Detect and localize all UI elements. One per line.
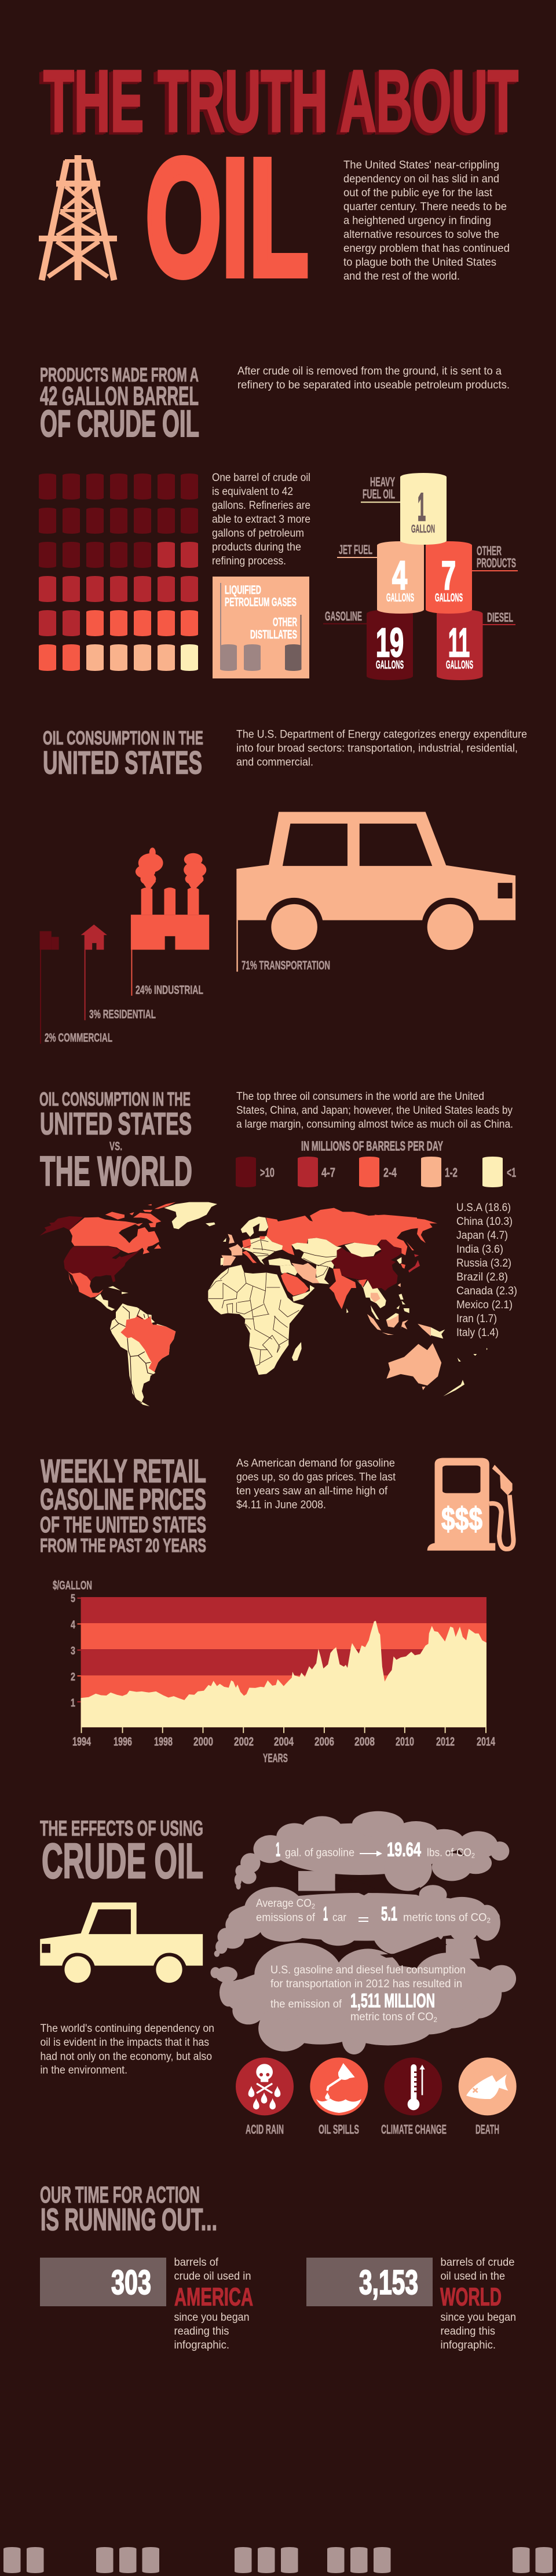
text: continuing dependency xyxy=(41,2023,214,2076)
label: 3% residential: 3% RESIDENTIAL xyxy=(89,1008,156,1021)
label: oil spills: OIL SPILLS xyxy=(319,2122,359,2137)
label: diesel: DIESEL xyxy=(487,610,513,625)
axis: dollars per gallon: $/GALLON xyxy=(53,1579,92,1592)
label: other products xyxy=(472,544,518,571)
axis: years: 1996 xyxy=(114,1735,132,1748)
stat: 1 gallon of gasoline to 19.64 lbs of CO2: 1 xyxy=(276,1839,280,1861)
list: top consumers: Iran (1.7) xyxy=(456,1313,497,1325)
axis: dollars per gallon xyxy=(53,1579,92,1709)
heading: oil consumption in the United States xyxy=(43,727,203,780)
text: one barrel explanation: able to extract 3 more xyxy=(212,513,310,526)
stat: 1 gallon of gasoline to 19.64 lbs of CO2: 19.64 xyxy=(387,1839,421,1861)
label: 2% commercial: 2% COMMERCIAL xyxy=(45,1032,112,1044)
stat: 1,511 million metric tons of CO2: 1,511 MILLION xyxy=(350,1990,435,2012)
icon: climate change xyxy=(384,2057,442,2115)
barrel: heavy fuel oil 1 gallon: 1 xyxy=(418,485,426,529)
barrel: gasoline 19 gallons: GALLONS xyxy=(376,659,404,671)
illustration: exhaust clouds xyxy=(210,1811,516,2054)
text: demand and prices: As American demand for gasoline xyxy=(236,1458,395,1469)
legend: millions of barrels per day: IN MILLIONS OF BARRELS PER DAY xyxy=(301,1138,443,1153)
label: climate change: CLIMATE CHANGE xyxy=(381,2122,447,2137)
text: one barrel explanation xyxy=(212,472,310,567)
list: top consumers: Canada (2.3) xyxy=(456,1285,517,1297)
axis: years: YEARS xyxy=(263,1752,288,1765)
text: top three consumers: The top three oil consumers in the world are the United xyxy=(236,1091,484,1103)
heading: United States vs. the world: OIL CONSUMPTION IN THE xyxy=(39,1088,191,1110)
text: intro paragraph: a heightened urgency in finding xyxy=(343,215,491,227)
map: world oil consumption xyxy=(39,1202,488,1406)
chart: stacked barrels by product xyxy=(323,473,518,680)
callout: other refinery products box xyxy=(213,577,309,678)
text: energy sectors xyxy=(236,728,527,769)
label: gasoline: GASOLINE xyxy=(325,609,362,623)
callout: other refinery products box: LIQUIFIED xyxy=(225,584,261,597)
text: intro paragraph: energy problem that has continued xyxy=(343,243,510,255)
text: intro paragraph: The United States' near-crippling xyxy=(343,159,499,171)
stat: 303 barrels in America: crude oil used in xyxy=(174,2270,251,2283)
text: continuing dependency: in the environment. xyxy=(41,2064,127,2076)
stat: 3,153 barrels in the world: barrels of crude xyxy=(440,2256,514,2269)
text: top three consumers xyxy=(236,1091,513,1131)
label: heavy fuel oil xyxy=(361,475,401,502)
text: intro paragraph xyxy=(343,159,510,282)
stat: 303 barrels in America: 303 xyxy=(111,2263,151,2302)
footer: row of barrels xyxy=(3,2547,553,2573)
chart: 42 barrel unit grid xyxy=(39,474,198,671)
text: one barrel explanation: gallons. Refineries are xyxy=(212,500,310,512)
callout: other refinery products box: DISTILLATES xyxy=(250,628,297,641)
stat: 1 car equals 5.1 metric tons of CO2: emissions of xyxy=(256,1911,316,1924)
callout: other refinery products box: PETROLEUM GASES xyxy=(225,596,297,609)
icon: oil derrick xyxy=(39,155,117,280)
heading: our time for action is running out: OUR TIME FOR ACTION xyxy=(40,2182,200,2208)
barrel: diesel 11 gallons xyxy=(437,610,483,680)
heading: the effects of using crude oil: CRUDE OIL xyxy=(42,1834,203,1889)
stat: 303 barrels in America: AMERICA xyxy=(174,2283,253,2311)
stat: 303 barrels in America: since you began xyxy=(174,2311,249,2324)
label: 24% industrial: 24% INDUSTRIAL xyxy=(136,984,203,997)
label: jet fuel xyxy=(337,542,377,558)
icon: dead fish xyxy=(459,2057,517,2115)
axis: years: 2010 xyxy=(396,1735,414,1748)
text: one barrel explanation: refining process. xyxy=(212,555,286,567)
barrel: diesel 11 gallons: GALLONS xyxy=(446,659,473,671)
text: top three consumers: a large margin, consuming almost twice as much oil as China. xyxy=(236,1118,513,1131)
text: one barrel explanation: One barrel of crude oil xyxy=(212,472,310,484)
text: one barrel explanation: is equivalent to 42 xyxy=(212,486,293,498)
text: one barrel explanation: gallons of petroleum xyxy=(212,527,304,540)
panel: US vs the world xyxy=(39,1088,517,1406)
barrel: other products 7 gallons: 7 xyxy=(441,553,456,598)
stat: 1,511 million metric tons of CO2: U.S. gasoline and diesel fuel consumption xyxy=(270,1964,466,1976)
text: intro paragraph: dependency on oil has slid in and xyxy=(343,173,499,185)
stat: 3,153 barrels in the world: WORLD xyxy=(440,2283,502,2311)
icon: pickup truck xyxy=(40,1903,203,1983)
heading: products made from a 42 gallon barrel: 42 GALLON BARREL xyxy=(40,381,199,411)
text: demand and prices xyxy=(236,1458,396,1511)
text: intro paragraph: quarter century. There needs to be xyxy=(343,201,507,213)
stat: 1,511 million metric tons of CO2: the emission of xyxy=(270,1998,342,2010)
panel: gasoline prices xyxy=(40,1453,514,1765)
text: one barrel explanation: products during the xyxy=(212,541,301,553)
axis: years xyxy=(72,1735,495,1765)
axis: years: 2014 xyxy=(477,1735,495,1748)
text: intro paragraph: and the rest of the world. xyxy=(343,270,460,282)
stat: 1,511 million metric tons of CO2: 2 xyxy=(434,2016,437,2024)
label: other products: PRODUCTS xyxy=(477,556,516,570)
legend: millions of barrels per day: 1-2 xyxy=(445,1165,458,1180)
label: jet fuel: JET FUEL xyxy=(339,542,372,557)
barrel: other products 7 gallons xyxy=(426,541,472,614)
stat: 1 car equals 5.1 metric tons of CO2: 2 xyxy=(487,1916,491,1924)
barrel: gasoline 19 gallons: 19 xyxy=(376,620,404,665)
legend: millions of barrels per day: >10 xyxy=(260,1165,275,1180)
heading: products made from a 42 gallon barrel xyxy=(40,364,199,445)
list: top consumers: Japan (4.7) xyxy=(456,1230,508,1242)
heading: oil consumption in the United States: OIL CONSUMPTION IN THE xyxy=(43,727,203,748)
panel: time for action xyxy=(40,2182,516,2351)
axis: dollars per gallon: 3 xyxy=(71,1645,75,1657)
heading: our time for action is running out: IS RUNNING OUT... xyxy=(41,2203,217,2237)
icon: acid rain xyxy=(236,2057,294,2115)
heading: United States vs. the world: UNITED STATES xyxy=(40,1107,192,1142)
text: continuing dependency: had not only on the economy, but also xyxy=(41,2050,212,2063)
barrel: other products 7 gallons: GALLONS xyxy=(435,592,463,604)
axis: years: 2000 xyxy=(193,1735,213,1748)
list: top consumers: Russia (3.2) xyxy=(456,1257,511,1269)
axis: dollars per gallon: 5 xyxy=(71,1593,75,1605)
axis: dollars per gallon: 1 xyxy=(71,1697,75,1709)
heading: products made from a 42 gallon barrel: PRODUCTS MADE FROM A xyxy=(40,364,199,386)
heading: products made from a 42 gallon barrel: OF CRUDE OIL xyxy=(40,402,199,445)
barrel: jet fuel 4 gallons: 4 xyxy=(392,553,407,598)
text: demand and prices: $4.11 in June 2008. xyxy=(236,1499,326,1511)
barrel: gasoline 19 gallons xyxy=(367,610,413,680)
axis: years: 2004 xyxy=(274,1735,294,1748)
text: refinery intro xyxy=(237,365,510,391)
icon: gas pump xyxy=(427,1458,514,1551)
icon: oil spills xyxy=(310,2057,368,2115)
legend: millions of barrels per day: 2-4 xyxy=(383,1165,397,1180)
heading: oil consumption in the United States: UNITED STATES xyxy=(43,744,202,780)
label: other products: OTHER xyxy=(477,544,502,558)
panel: effects of crude oil xyxy=(40,1811,517,2137)
barrel: jet fuel 4 gallons xyxy=(377,541,424,614)
text: refinery intro: After crude oil is removed from the ground, it is sent to a xyxy=(237,365,502,377)
label: heavy fuel oil: HEAVY xyxy=(370,475,395,489)
heading: weekly retail gasoline prices xyxy=(40,1453,206,1556)
stat: 3,153 barrels in the world: infographic. xyxy=(440,2339,496,2351)
heading: weekly retail gasoline prices: FROM THE PAST 20 YEARS xyxy=(40,1535,206,1556)
text: continuing dependency: The world's continuing dependency on xyxy=(41,2023,214,2035)
list: top consumers: U.S.A (18.6) xyxy=(456,1202,511,1214)
axis: years: 2002 xyxy=(234,1735,254,1748)
axis: years: 2008 xyxy=(354,1735,375,1748)
icon: car, 71% transportation xyxy=(236,812,515,972)
text: energy sectors: The U.S. Department of Energy categorizes energy expenditure xyxy=(236,728,527,741)
axis: years: 2006 xyxy=(314,1735,334,1748)
heading: our time for action is running out xyxy=(40,2182,217,2237)
panel: products from a barrel xyxy=(39,364,518,680)
stat: 1 gallon of gasoline to 19.64 lbs of CO2: 2 xyxy=(471,1851,475,1859)
legend: millions of barrels per day: 4-7 xyxy=(321,1165,335,1180)
legend: millions of barrels per day: <1 xyxy=(507,1165,516,1180)
stat: 303 barrels in America: reading this xyxy=(174,2325,229,2338)
stat: 303 barrels in America: infographic. xyxy=(174,2339,229,2351)
label: 71% transportation: 71% TRANSPORTATION xyxy=(242,959,330,973)
stat: 1 car equals 5.1 metric tons of CO2: 2 xyxy=(312,1902,315,1910)
heading: weekly retail gasoline prices: GASOLINE PRICES xyxy=(40,1483,206,1515)
list: top consumers: Mexico (2.1) xyxy=(456,1299,513,1311)
text: intro paragraph: alternative resources to solve the xyxy=(343,229,499,241)
text: demand and prices: goes up, so do gas prices. The last xyxy=(236,1472,396,1483)
barrel: diesel 11 gallons: 11 xyxy=(448,620,470,665)
text: continuing dependency: oil is evident in the impacts that it has xyxy=(41,2036,209,2049)
legend: millions of barrels per day xyxy=(236,1138,516,1187)
heading: weekly retail gasoline prices: WEEKLY RETAIL xyxy=(41,1453,206,1490)
stat: 1 gallon of gasoline to 19.64 lbs of CO2: lbs. of CO xyxy=(427,1847,475,1859)
stat: 303 barrels in America: barrels of xyxy=(174,2256,219,2269)
label: acid rain: ACID RAIN xyxy=(246,2122,284,2137)
text: intro paragraph: to plague both the United States xyxy=(343,256,496,269)
map: Europe, Africa and Asia xyxy=(206,1208,417,1375)
stat: 3,153 barrels in the world: reading this xyxy=(440,2325,495,2338)
text: intro paragraph: out of the public eye for the last xyxy=(343,187,493,199)
stat: 3,153 barrels in the world: oil used in the xyxy=(440,2270,505,2283)
callout: other refinery products box: OTHER xyxy=(273,616,297,629)
text: energy sectors: and commercial. xyxy=(236,756,313,769)
text: top three consumers: States, China, and Japan; however, the United States leads by xyxy=(236,1104,513,1117)
axis: years: 1998 xyxy=(154,1735,173,1748)
text: demand and prices: ten years saw an all-time high of xyxy=(236,1485,388,1497)
stat: 1 car equals 5.1 metric tons of CO2: 5.1 xyxy=(381,1903,397,1925)
label: heavy fuel oil: FUEL OIL xyxy=(363,487,395,501)
heading: the effects of using crude oil: THE EFFECTS OF USING xyxy=(40,1817,203,1840)
list: top consumers: China (10.3) xyxy=(456,1216,513,1228)
text: refinery intro: refinery to be separated into useable petroleum products. xyxy=(237,379,510,391)
heading: United States vs. the world: VS. xyxy=(109,1140,122,1153)
list: top consumers xyxy=(456,1202,517,1339)
stat: 1 car equals 5.1 metric tons of CO2: Average CO xyxy=(256,1898,316,1910)
heading: OIL: OIL xyxy=(145,124,309,311)
heading: United States vs. the world: THE WORLD xyxy=(40,1148,192,1195)
list: top consumers: Brazil (2.8) xyxy=(456,1271,508,1283)
stat: 1,511 million metric tons of CO2 xyxy=(270,1964,466,2024)
label: death: DEATH xyxy=(475,2122,499,2137)
stat: 1,511 million metric tons of CO2: for transportation in 2012 has resulted in xyxy=(270,1978,462,1990)
list: top consumers: India (3.6) xyxy=(456,1243,503,1256)
heading: weekly retail gasoline prices: OF THE UNITED STATES xyxy=(40,1513,206,1537)
axis: dollars per gallon: 2 xyxy=(71,1671,75,1683)
panel: US consumption by sector xyxy=(40,727,527,1044)
icon: office buildings, 2% commercial xyxy=(40,931,59,1044)
chart: weekly gasoline price area chart xyxy=(53,1579,495,1765)
barrel: jet fuel 4 gallons: GALLONS xyxy=(386,592,414,604)
stat: 3,153 barrels in the world xyxy=(306,2256,516,2351)
stat: 1,511 million metric tons of CO2: metric tons of CO xyxy=(350,2011,436,2023)
text: energy sectors: into four broad sectors: transportation, industrial, residential, xyxy=(236,742,518,755)
icon: gas pump: $$$ xyxy=(441,1500,482,1537)
icon: factory, 24% industrial xyxy=(131,847,209,996)
map: Americas xyxy=(39,1202,217,1406)
heading: the effects of using crude oil xyxy=(40,1817,203,1889)
stat: 3,153 barrels in the world: 3,153 xyxy=(359,2263,418,2302)
icon: house, 3% residential xyxy=(81,924,107,1020)
stat: 303 barrels in America xyxy=(40,2256,253,2351)
axis: dollars per gallon: 4 xyxy=(71,1619,75,1631)
stat: 1 car equals 5.1 metric tons of CO2 xyxy=(256,1898,491,1925)
axis: years: 2012 xyxy=(436,1735,455,1748)
stat: 1 gallon of gasoline to 19.64 lbs of CO2: gal. of gasoline xyxy=(285,1847,354,1859)
stat: 1 car equals 5.1 metric tons of CO2: 1 xyxy=(323,1903,328,1925)
heading: United States vs. the world xyxy=(39,1088,192,1195)
label: gasoline xyxy=(323,609,367,624)
map: far east Russia and Japan xyxy=(375,1214,437,1272)
barrel: heavy fuel oil 1 gallon: GALLON xyxy=(411,523,435,535)
stat: 3,153 barrels in the world: since you began xyxy=(440,2311,516,2324)
list: top consumers: Italy (1.4) xyxy=(456,1327,499,1339)
barrel: heavy fuel oil 1 gallon xyxy=(400,473,447,545)
stat: 1 car equals 5.1 metric tons of CO2: car xyxy=(332,1911,347,1924)
map: Australia and Oceania xyxy=(386,1324,488,1396)
axis: years: 1994 xyxy=(72,1735,91,1748)
stat: 1 gallon of gasoline to 19.64 lbs of CO2 xyxy=(276,1839,475,1861)
label: diesel xyxy=(482,610,515,625)
stat: 1 car equals 5.1 metric tons of CO2: metric tons of CO xyxy=(403,1911,489,1924)
